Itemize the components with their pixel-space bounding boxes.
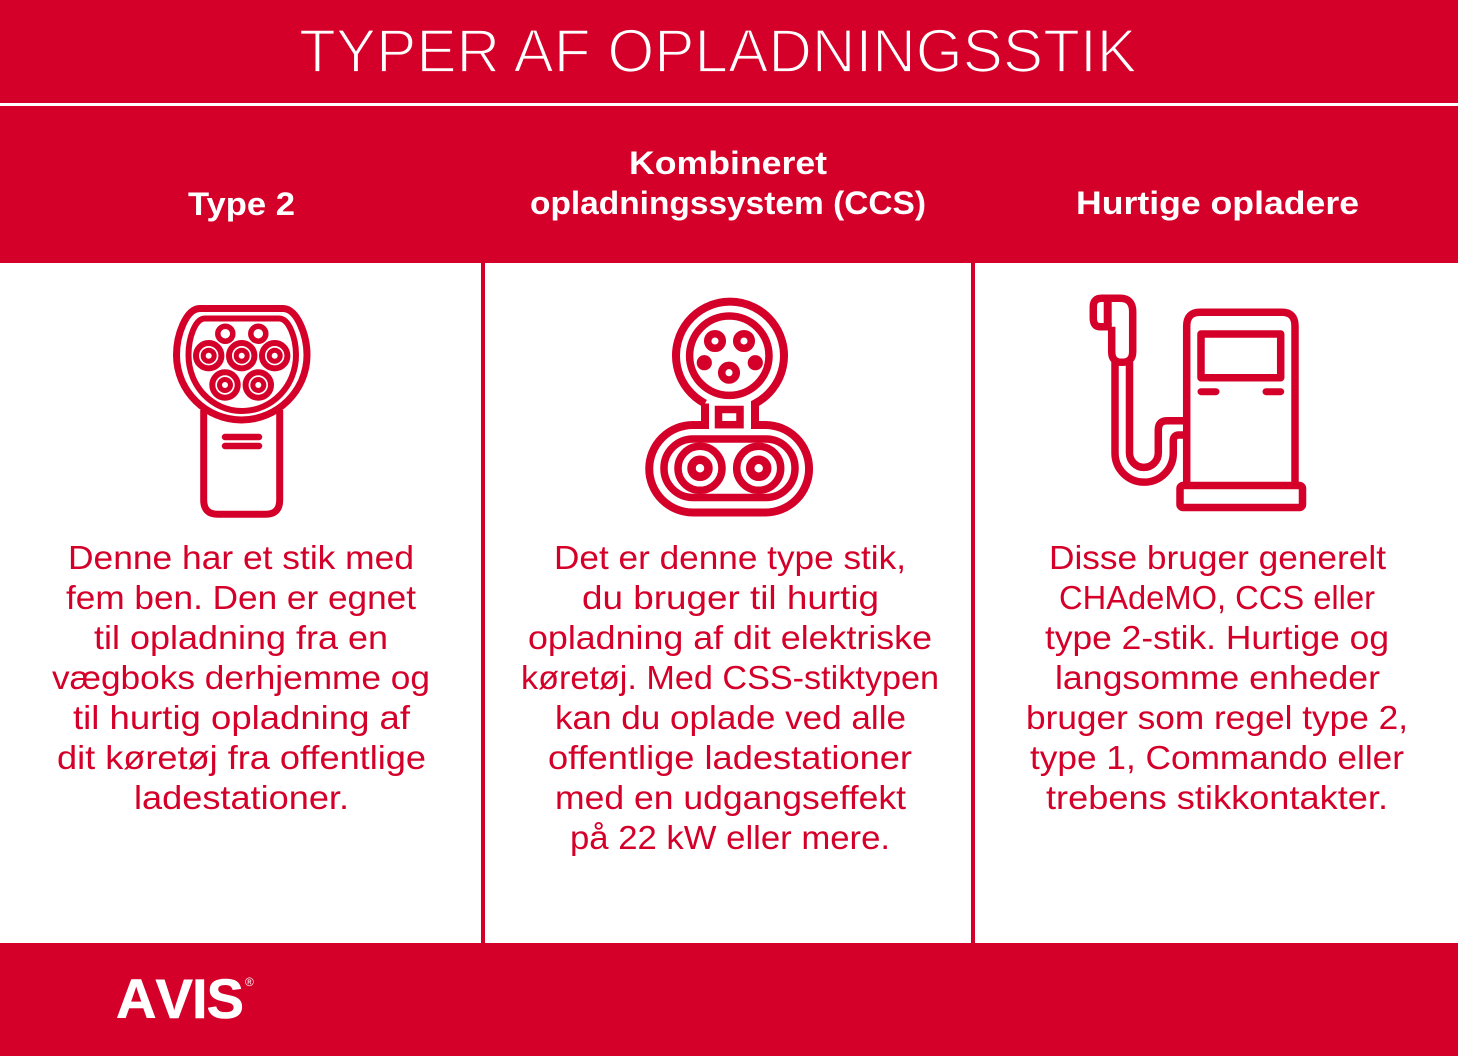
text block: fast chargers description: CHAdeMO, CCS eller (1059, 579, 1375, 616)
column heading: Type 2: Type 2 (188, 186, 295, 222)
icon: CCS connector (649, 302, 809, 512)
footer band (0, 943, 1458, 1056)
text block: Type 2 description: til opladning fra en (94, 619, 388, 656)
text block: Type 2 description: vægboks derhjemme og (52, 659, 430, 696)
text block: fast chargers description: trebens stikkontakter. (1046, 779, 1388, 816)
text block: CCS description: køretøj. Med CSS-stiktypen (521, 659, 939, 696)
text block: Type 2 description: Denne har et stik med (68, 539, 414, 576)
text block: fast chargers description: bruger som regel type 2, (1026, 699, 1408, 736)
text block: fast chargers description (1026, 539, 1408, 816)
text block: Type 2 description: dit køretøj fra offentlige (57, 739, 426, 776)
icon: fast charger station (1093, 298, 1302, 508)
text block: CCS description: offentlige ladestationer (548, 739, 912, 776)
text block: CCS description: med en udgangseffekt (555, 779, 906, 816)
text block: Type 2 description: fem ben. Den er egnet (66, 579, 416, 616)
text block: CCS description: du bruger til hurtig (582, 579, 879, 616)
text block: Type 2 description: til hurtig opladning af (73, 699, 411, 736)
text block: fast chargers description: Disse bruger generelt (1049, 539, 1386, 576)
title band (0, 0, 1458, 263)
text block: CCS description: Det er denne type stik, (554, 539, 906, 576)
title: TYPER AF OPLADNINGSSTIK (299, 17, 1137, 85)
icon: type 2 connector (176, 308, 307, 514)
logo: AVIS: AVIS (116, 967, 244, 1030)
text block: Type 2 description (52, 539, 430, 816)
text block: CCS description (521, 539, 939, 856)
text block: CCS description: opladning af dit elektriske (528, 619, 932, 656)
text block: fast chargers description: type 2-stik. Hurtige og (1045, 619, 1389, 656)
text block: fast chargers description: langsomme enheder (1055, 659, 1380, 696)
column heading: Hurtige opladere: Hurtige opladere (1076, 185, 1359, 221)
text block: CCS description: på 22 kW eller mere. (570, 819, 890, 856)
text block: fast chargers description: type 1, Commando eller (1030, 739, 1404, 776)
text block: Type 2 description: ladestationer. (134, 779, 349, 816)
column heading: Kombineret opladningssystem (CCS): opladningssystem (CCS) (530, 185, 926, 221)
column heading: Kombineret opladningssystem (CCS): Kombineret (629, 145, 827, 181)
logo: AVIS: ® (245, 975, 254, 989)
column heading: Kombineret opladningssystem (CCS) (530, 145, 926, 221)
text block: CCS description: kan du oplade ved alle (555, 699, 906, 736)
